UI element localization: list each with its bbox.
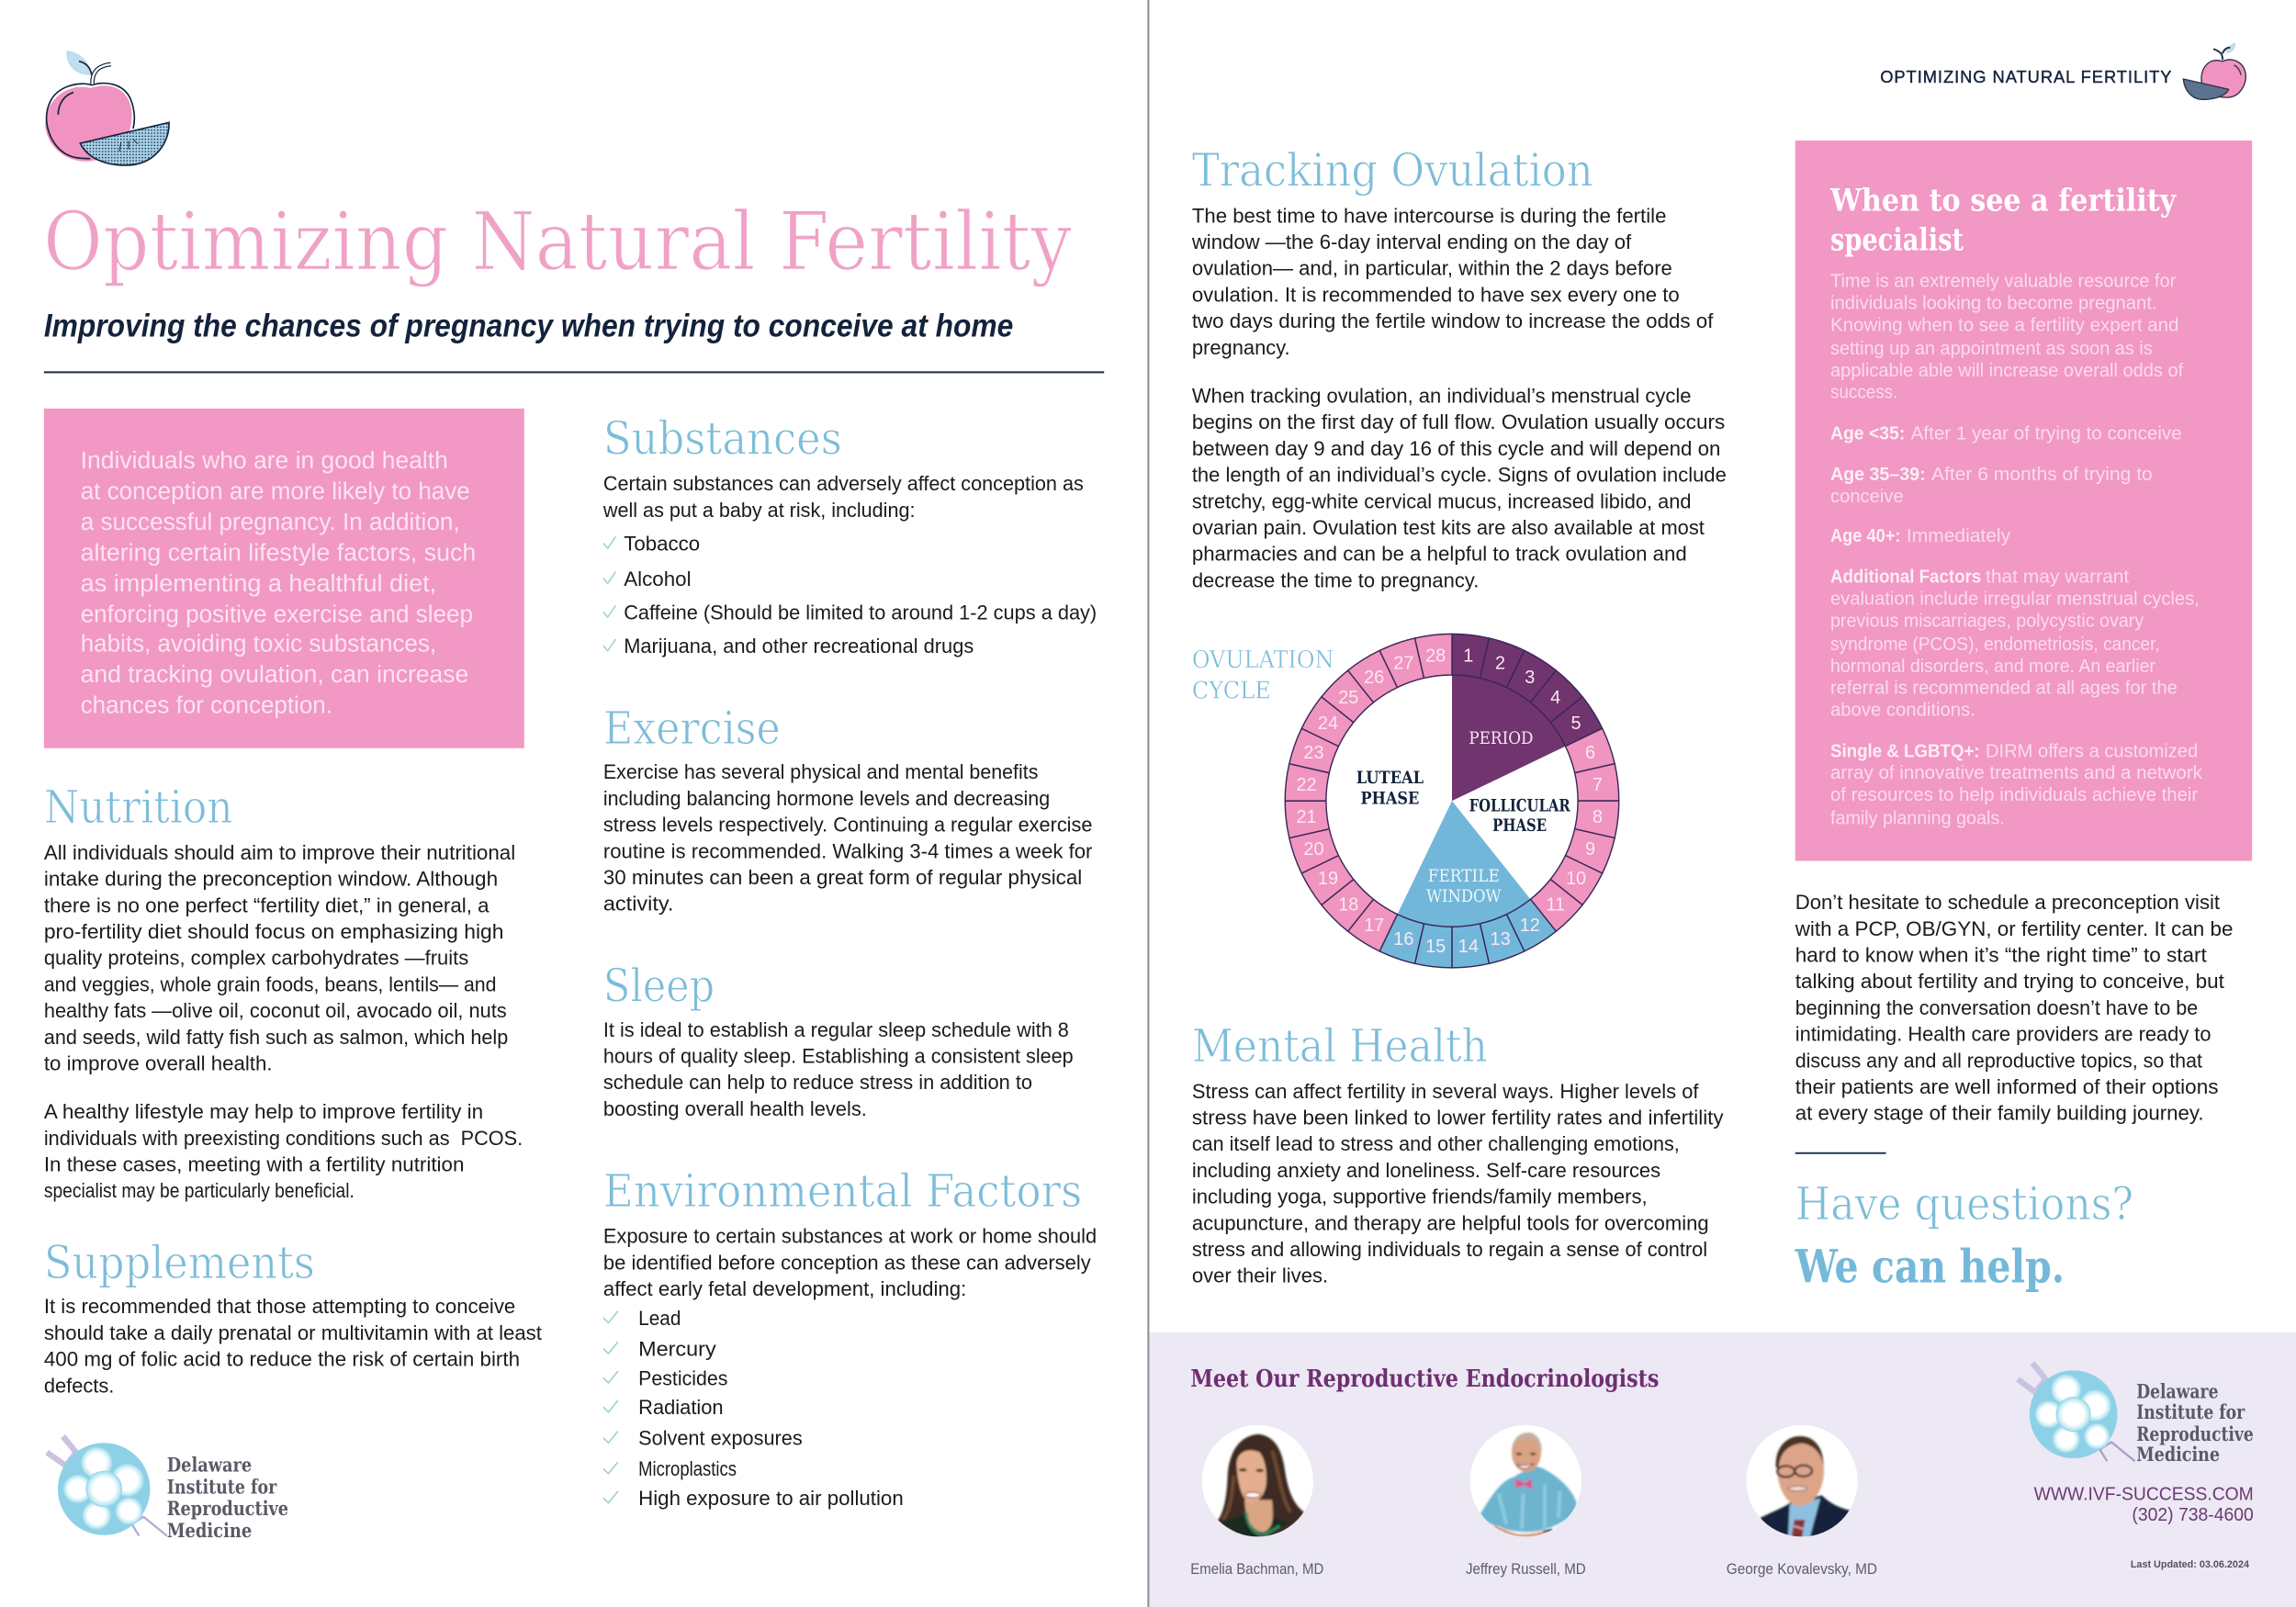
- text block: nutrition: to improve overall health.: [44, 1051, 273, 1074]
- chart: ovulation cycle wheel: 14: [1458, 937, 1479, 957]
- panel: when to see a specialist: Time is an extremely valuable resource for: [1830, 272, 2177, 292]
- chart: ovulation cycle wheel: PHASE: [1361, 789, 1419, 808]
- contact details: (302) 738-4600: [2132, 1505, 2254, 1525]
- text block: nutrition: and veggies, whole grain foods, beans, lentils— and: [44, 972, 496, 995]
- panel: when to see a specialist: After 1 year of trying to conceive: [1911, 423, 2182, 444]
- chart: ovulation cycle wheel: 2: [1495, 654, 1505, 674]
- heading: sleep: Sleep: [603, 960, 715, 1013]
- text block: preconception visit: at every stage of their family building journey.: [1795, 1102, 2204, 1125]
- panel: when to see a specialist: referral is recommended at all ages for the: [1830, 679, 2178, 699]
- portrait: Jeffrey Russell: [1466, 1425, 1586, 1578]
- chart: ovulation cycle wheel: 7: [1593, 775, 1603, 795]
- text block: sleep: schedule can help to reduce stress in addition to: [603, 1071, 1032, 1094]
- text block: environmental factors: Pesticides: [638, 1366, 727, 1389]
- panel: when to see a specialist: After 6 months of trying to: [1931, 465, 2153, 485]
- icon: apple logo left: [45, 51, 169, 165]
- chart: ovulation cycle wheel: 17: [1364, 916, 1384, 936]
- chart: ovulation cycle wheel: 24: [1318, 714, 1338, 734]
- chart: ovulation cycle wheel: 1: [1463, 646, 1473, 667]
- logo: Delaware Institute left: Institute for: [167, 1476, 277, 1499]
- panel: intro callout: and tracking ovulation, can increase: [81, 660, 468, 688]
- text block: tracking ovulation: When tracking ovulation, an individual’s menstrual cycle: [1192, 384, 1692, 407]
- text block: tracking ovulation: pregnancy.: [1192, 336, 1290, 359]
- text block: tracking ovulation: The best time to have intercourse is during the fertile: [1192, 204, 1666, 227]
- text block: nutrition: specialist may be particularly beneficial.: [44, 1179, 355, 1202]
- contact details: [2034, 1484, 2254, 1525]
- text block: preconception visit: hard to know when it’s “the right time” to start: [1795, 944, 2208, 967]
- text block: tracking ovulation: two days during the fertile window to increase the odds of: [1192, 309, 1714, 332]
- text block: nutrition: All individuals should aim to improve their nutritional: [44, 841, 515, 864]
- text block: tracking ovulation: [1191, 204, 1727, 591]
- panel: when to see a specialist: syndrome (PCOS), endometriosis, cancer,: [1830, 635, 2160, 655]
- portrait: Emelia Bachman: Emelia Bachman, MD: [1190, 1560, 1323, 1578]
- chart: ovulation cycle wheel: 25: [1338, 688, 1358, 708]
- text block: exercise: activity.: [603, 893, 673, 916]
- text block: exercise: routine is recommended. Walking 3-4 times a week for: [603, 839, 1093, 862]
- panel: when to see a specialist: evaluation include irregular menstrual cycles,: [1830, 589, 2200, 609]
- logo: Delaware Institute left: Reproductive: [167, 1498, 288, 1521]
- panel: intro callout: enforcing positive exercise and sleep: [81, 601, 473, 628]
- text block: environmental factors: Microplastics: [638, 1457, 737, 1480]
- chart: ovulation cycle label: CYCLE: [1192, 678, 1271, 705]
- chart: ovulation cycle wheel: 4: [1550, 688, 1560, 708]
- chart: ovulation cycle wheel: 28: [1425, 646, 1446, 667]
- chart: ovulation cycle wheel: 6: [1585, 743, 1595, 763]
- text block: substances: Caffeine (Should be limited to around 1-2 cups a day): [624, 601, 1097, 624]
- text block: tracking ovulation: between day 9 and day 16 of this cycle and will depend on: [1192, 437, 1720, 460]
- text block: nutrition: pro-fertility diet should focus on emphasizing high: [44, 920, 503, 943]
- text block: preconception visit: with a PCP, OB/GYN, or fertility center. It can be: [1795, 917, 2233, 940]
- text block: tracking ovulation: window —the 6-day interval ending on the day of: [1191, 230, 1632, 253]
- chart: ovulation cycle wheel: 13: [1491, 929, 1511, 950]
- panel: intro callout: habits, avoiding toxic substances,: [81, 630, 436, 657]
- text block: sleep: It is ideal to establish a regular sleep schedule with 8: [603, 1018, 1069, 1041]
- panel: when to see a specialist: Age <35:: [1830, 423, 1905, 444]
- chart: ovulation cycle wheel: 9: [1585, 839, 1595, 860]
- logo: Delaware Institute left: Delaware: [167, 1454, 252, 1477]
- text block: environmental factors: Exposure to certain substances at work or home should: [603, 1225, 1097, 1248]
- chart: ovulation cycle wheel: 26: [1364, 668, 1384, 688]
- text block: preconception visit: [1795, 891, 2233, 1125]
- text block: sleep: hours of quality sleep. Establishing a consistent sleep: [603, 1045, 1074, 1068]
- panel: intro callout: [44, 409, 524, 748]
- chart: ovulation cycle wheel: 21: [1296, 807, 1317, 827]
- panel: when to see a specialist: Immediately: [1907, 526, 2010, 546]
- text block: mental health: [1192, 1080, 1724, 1287]
- chart: ovulation cycle wheel: 5: [1571, 714, 1581, 734]
- chart: ovulation cycle wheel: WINDOW: [1426, 887, 1502, 906]
- portrait: George Kovalevsky: George Kovalevsky, MD: [1727, 1560, 1877, 1578]
- text block: nutrition: there is no one perfect “fertility diet,” in general, a: [44, 893, 490, 916]
- text block: preconception visit: discuss any and all reproductive topics, so that: [1795, 1049, 2203, 1072]
- text block: exercise: including balancing hormone levels and decreasing: [603, 787, 1050, 810]
- panel: when to see a specialist: hormonal disorders, and more. An earlier: [1830, 657, 2155, 677]
- call to action: have questions: Have questions?: [1795, 1177, 2133, 1231]
- heading: meet our endocrinologists: Meet Our Reproductive Endocrinologists: [1190, 1365, 1659, 1393]
- logo: Delaware Institute right: Medicine: [2136, 1444, 2220, 1467]
- text block: sleep: [603, 1018, 1074, 1120]
- chart: ovulation cycle wheel: FERTILE: [1428, 867, 1500, 886]
- chart: ovulation cycle wheel: 22: [1296, 775, 1317, 795]
- chart: ovulation cycle wheel: 23: [1303, 743, 1324, 763]
- text block: environmental factors: [603, 1225, 1097, 1510]
- panel: intro callout: as implementing a healthful diet,: [81, 569, 436, 597]
- text block: tracking ovulation: the length of an individual’s cycle. Signs of ovulation include: [1192, 464, 1727, 487]
- text block: mental health: including anxiety and loneliness. Self-care resources: [1192, 1159, 1660, 1182]
- text block: supplements: It is recommended that those attempting to conceive: [44, 1295, 515, 1318]
- text block: preconception visit: talking about fertility and trying to conceive, but: [1795, 970, 2225, 993]
- text block: sleep: boosting overall health levels.: [603, 1097, 867, 1120]
- portrait: George Kovalevsky: [1727, 1425, 1877, 1578]
- running header: OPTIMIZING NATURAL FERTILITY: [1880, 67, 2171, 86]
- text block: mental health: acupuncture, and therapy are helpful tools for overcoming: [1192, 1211, 1709, 1234]
- logo: Delaware Institute right: [2018, 1363, 2254, 1467]
- text block: environmental factors: affect early fetal development, including:: [603, 1277, 966, 1300]
- text block: exercise: stress levels respectively. Continuing a regular exercise: [603, 814, 1092, 837]
- last updated note: Last Updated: 03.06.2024: [2131, 1559, 2250, 1570]
- text block: nutrition: healthy fats —olive oil, coconut oil, avocado oil, nuts: [44, 999, 507, 1022]
- icon: apple small header: [2183, 43, 2245, 99]
- panel: intro callout: Individuals who are in good health: [81, 446, 448, 474]
- heading: substances: Substances: [603, 411, 842, 465]
- portrait: Emelia Bachman: [1190, 1425, 1323, 1578]
- panel: when to see a specialist: specialist: [1830, 222, 1964, 258]
- text block: environmental factors: High exposure to air pollution: [638, 1487, 904, 1510]
- text block: supplements: 400 mg of folic acid to reduce the risk of certain birth: [44, 1348, 520, 1371]
- chart: ovulation cycle wheel: 18: [1338, 895, 1358, 916]
- heading: exercise: Exercise: [603, 702, 781, 755]
- heading: environmental factors: Environmental Factors: [603, 1164, 1082, 1218]
- text block: environmental factors: be identified before conception as these can adversely: [603, 1251, 1092, 1274]
- panel: when to see a specialist: Age 40+:: [1830, 526, 1901, 546]
- text block: preconception visit: intimidating. Health care providers are ready to: [1795, 1023, 2212, 1046]
- portrait: Jeffrey Russell: Jeffrey Russell, MD: [1466, 1560, 1586, 1578]
- chart: ovulation cycle wheel: 12: [1520, 916, 1540, 936]
- chart: ovulation cycle wheel: 3: [1525, 668, 1535, 688]
- panel: when to see a specialist: individuals looking to become pregnant.: [1830, 293, 2157, 313]
- text block: nutrition: A healthy lifestyle may help to improve fertility in: [44, 1100, 483, 1123]
- text block: tracking ovulation: ovulation— and, in particular, within the 2 days before: [1192, 257, 1672, 280]
- chart: ovulation cycle wheel: 20: [1303, 839, 1324, 860]
- text block: environmental factors: Radiation: [638, 1396, 724, 1419]
- text block: nutrition: [44, 841, 523, 1202]
- text block: environmental factors: Solvent exposures: [638, 1427, 803, 1450]
- text block: environmental factors: Lead: [638, 1307, 681, 1330]
- panel: when to see a specialist: DIRM offers a customized: [1986, 741, 2198, 761]
- heading: mental health: Mental Health: [1192, 1019, 1488, 1073]
- text block: tracking ovulation: begins on the first day of full flow. Ovulation usually occurs: [1192, 410, 1725, 433]
- panel: intro callout: at conception are more likely to have: [81, 478, 470, 505]
- panel: when to see a specialist: previous miscarriages, polycystic ovary: [1830, 611, 2144, 631]
- title: Optimizing Natural Fertility: [43, 195, 1073, 288]
- text block: preconception visit: beginning the conversation doesn’t have to be: [1795, 996, 2198, 1019]
- heading: tracking ovulation: Tracking Ovulation: [1192, 143, 1593, 197]
- subtitle: Improving the chances of pregnancy when trying to conceive at home: [44, 309, 1013, 344]
- chart: ovulation cycle wheel: 10: [1566, 869, 1586, 889]
- footer band: physicians: [1150, 1332, 2296, 1607]
- call to action: have questions: We can help.: [1795, 1241, 2065, 1294]
- panel: when to see a specialist: [1795, 140, 2252, 860]
- panel: when to see a specialist: Single & LGBTQ+:: [1830, 741, 1980, 761]
- text block: mental health: Stress can affect fertility in several ways. Higher levels of: [1192, 1080, 1699, 1103]
- panel: when to see a specialist: above conditions.: [1830, 701, 1975, 721]
- logo: Delaware Institute left: Medicine: [167, 1520, 252, 1543]
- chart: ovulation cycle wheel: 8: [1593, 807, 1603, 827]
- panel: when to see a specialist: When to see a fertility: [1829, 183, 2178, 219]
- text block: tracking ovulation: decrease the time to pregnancy.: [1192, 568, 1479, 591]
- text block: supplements: should take a daily prenatal or multivitamin with at least: [44, 1321, 543, 1344]
- logo: Delaware Institute right: Reproductive: [2136, 1423, 2254, 1446]
- text block: tracking ovulation: stretchy, egg-white cervical mucus, increased libido, and: [1192, 489, 1692, 512]
- chart: ovulation cycle wheel: 19: [1318, 869, 1338, 889]
- text block: substances: Alcohol: [624, 568, 692, 590]
- chart: ovulation cycle wheel: 11: [1546, 895, 1565, 916]
- text block: substances: Marijuana, and other recreational drugs: [624, 635, 974, 657]
- text block: tracking ovulation: pharmacies and can be a helpful to track ovulation and: [1192, 543, 1687, 566]
- heading: nutrition: Nutrition: [44, 781, 233, 834]
- panel: when to see a specialist: Age 35–39:: [1830, 465, 1926, 485]
- logo: Delaware Institute right: Delaware: [2136, 1381, 2218, 1404]
- text block: substances: Certain substances can adversely affect conception as: [603, 472, 1084, 495]
- text block: nutrition: intake during the preconception window. Although: [44, 868, 498, 891]
- text block: supplements: defects.: [44, 1374, 114, 1397]
- chart: ovulation cycle wheel: LUTEAL: [1356, 769, 1424, 788]
- logo: Delaware Institute left: [47, 1436, 288, 1543]
- panel: intro callout: a successful pregnancy. In addition,: [81, 508, 460, 535]
- panel: when to see a specialist: success.: [1830, 383, 1897, 403]
- chart: ovulation cycle wheel: FOLLICULAR: [1469, 796, 1570, 815]
- chart: ovulation cycle wheel: 16: [1393, 929, 1413, 950]
- chart: ovulation cycle wheel: PHASE: [1492, 816, 1547, 836]
- text block: mental health: stress have been linked to lower fertility rates and infertility: [1192, 1106, 1724, 1129]
- text block: environmental factors: Mercury: [638, 1337, 717, 1360]
- text block: mental health: stress and allowing individuals to regain a sense of control: [1192, 1238, 1707, 1261]
- panel: intro callout: altering certain lifestyle factors, such: [81, 539, 476, 567]
- chart: ovulation cycle wheel: [1281, 630, 1623, 972]
- text block: nutrition: quality proteins, complex carbohydrates —fruits: [44, 947, 468, 970]
- text block: supplements: [44, 1295, 543, 1397]
- text block: exercise: Exercise has several physical and mental benefits: [603, 760, 1038, 783]
- text block: nutrition: In these cases, meeting with a fertility nutrition: [44, 1153, 464, 1176]
- logo: Delaware Institute right: Institute for: [2136, 1401, 2245, 1424]
- text block: exercise: 30 minutes can been a great form of regular physical: [603, 866, 1082, 889]
- chart: ovulation cycle label: [1192, 646, 1334, 705]
- text block: exercise: [603, 760, 1093, 916]
- text block: preconception visit: their patients are well informed of their options: [1795, 1075, 2218, 1098]
- chart: ovulation cycle label: OVULATION: [1192, 646, 1334, 674]
- page divider: [1147, 0, 1149, 1607]
- call to action: have questions: [1795, 1177, 2133, 1294]
- panel: intro callout: chances for conception.: [81, 691, 332, 718]
- text block: nutrition: individuals with preexisting conditions such as PCOS.: [44, 1127, 523, 1150]
- chart: ovulation cycle wheel: 27: [1393, 654, 1413, 674]
- panel: when to see a specialist: conceive: [1830, 487, 1904, 507]
- text block: nutrition: and seeds, wild fatty fish such as salmon, which help: [44, 1026, 508, 1049]
- panel: when to see a specialist: Knowing when to see a fertility expert and: [1830, 315, 2178, 335]
- contact details: WWW.IVF-SUCCESS.COM: [2034, 1484, 2254, 1504]
- panel: when to see a specialist: setting up an appointment as soon as is: [1830, 339, 2153, 359]
- panel: when to see a specialist: that may warrant: [1986, 568, 2130, 588]
- text block: substances: well as put a baby at risk, including:: [602, 499, 915, 522]
- text block: mental health: can itself lead to stress and other challenging emotions,: [1192, 1132, 1680, 1155]
- panel: when to see a specialist: Additional Factors: [1830, 568, 1981, 588]
- panel: when to see a specialist: family planning goals.: [1830, 809, 2005, 829]
- panel: when to see a specialist: of resources to help individuals achieve their: [1830, 785, 2199, 805]
- text block: substances: Tobacco: [624, 532, 700, 555]
- text block: tracking ovulation: ovarian pain. Ovulation test kits are also available at most: [1192, 516, 1705, 539]
- chart: ovulation cycle wheel: 15: [1425, 937, 1446, 957]
- chart: ovulation cycle wheel: PERIOD: [1469, 729, 1533, 748]
- text block: mental health: including yoga, supportive friends/family members,: [1192, 1186, 1648, 1208]
- text block: tracking ovulation: ovulation. It is recommended to have sex every one to: [1192, 283, 1680, 306]
- panel: when to see a specialist: array of innovative treatments and a network: [1830, 763, 2202, 783]
- panel: when to see a specialist: applicable able will increase overall odds of: [1830, 361, 2184, 381]
- text block: preconception visit: Don’t hesitate to schedule a preconception visit: [1795, 891, 2221, 914]
- text block: substances: [602, 472, 1097, 657]
- text block: mental health: over their lives.: [1192, 1264, 1328, 1287]
- heading: supplements: Supplements: [44, 1236, 315, 1289]
